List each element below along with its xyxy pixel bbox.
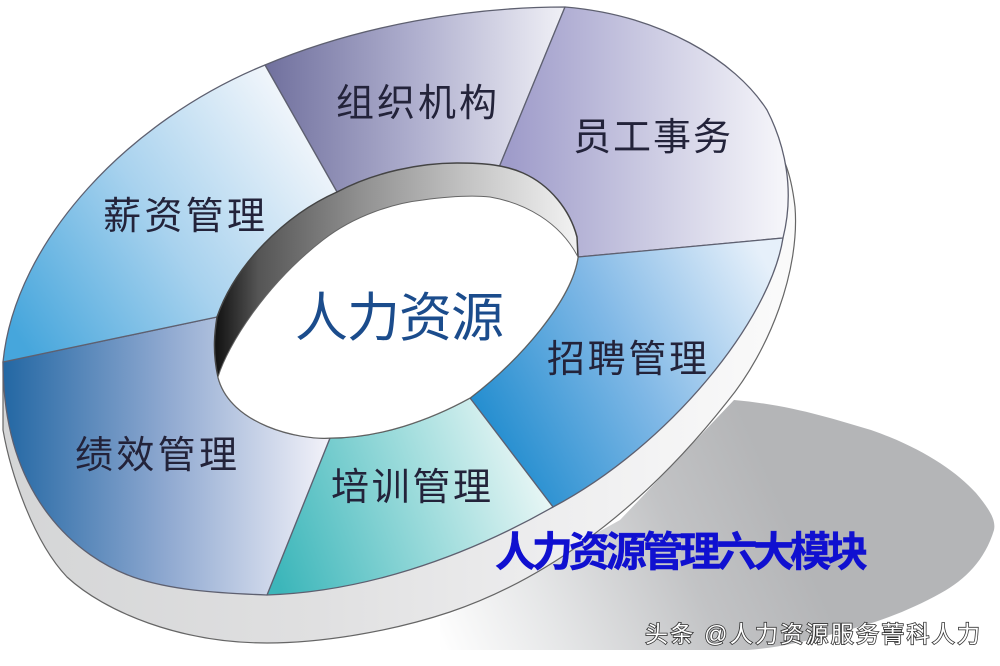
ring side wall xyxy=(3,163,796,643)
segment: 绩效管理 xyxy=(3,300,400,595)
label: 薪资管理: 薪资管理 xyxy=(103,196,265,238)
center hole opening xyxy=(218,196,578,438)
segment: 组织机构 xyxy=(265,7,565,300)
label: 组织机构: 组织机构 xyxy=(336,83,497,125)
ring top surface segments xyxy=(3,7,788,595)
center label: 人力资源 xyxy=(295,289,504,348)
title caption: 人力资源管理六大模块 xyxy=(495,529,868,575)
segment: 员工事务 xyxy=(400,7,788,300)
watermark: 头条 @人力资源服务菁科人力 xyxy=(645,621,980,647)
label: 员工事务: 员工事务 xyxy=(573,117,731,159)
segment: 薪资管理 xyxy=(3,65,400,362)
hole inner wall xyxy=(214,163,578,438)
label: 招聘管理: 招聘管理 xyxy=(547,339,707,381)
label: 培训管理: 培训管理 xyxy=(331,467,491,509)
ground shadow ellipse xyxy=(440,400,994,650)
label: 绩效管理: 绩效管理 xyxy=(75,435,237,477)
segment: 培训管理 xyxy=(267,300,553,595)
segment: 招聘管理 xyxy=(400,238,783,507)
